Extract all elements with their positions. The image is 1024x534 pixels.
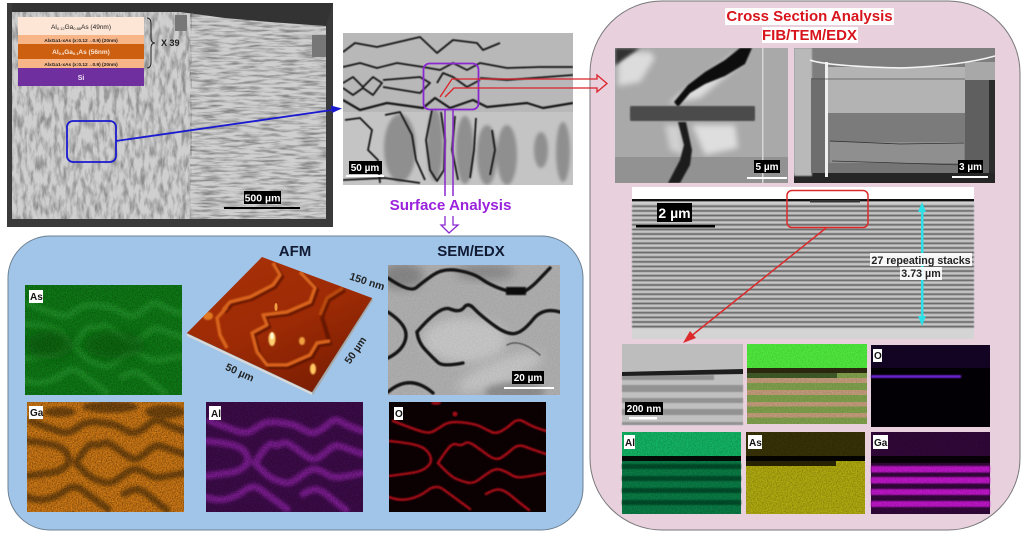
panel: magnified surface SEM	[343, 33, 573, 185]
heading: SEM/EDX: SEM/EDX	[437, 243, 505, 260]
callout: blue region on wafer	[67, 121, 116, 162]
map: Al: Al	[211, 409, 221, 420]
layer stack diagram: 0.88	[73, 26, 82, 31]
SEM image with 20 µm scale: 20 µm	[514, 373, 542, 384]
layer stack diagram	[18, 17, 144, 86]
map: As	[25, 285, 182, 395]
map: Al	[206, 402, 363, 512]
map: Ga: Ga	[30, 408, 44, 419]
image: FIB trench on crack: 5 µm	[756, 162, 779, 173]
image: FIB trench on crack	[615, 48, 788, 183]
panel: surface analysis	[8, 236, 583, 530]
map: As: As	[749, 438, 762, 449]
layer stack diagram: AlxGa1-xAs (x:0.12→0.9) (20nm)	[44, 62, 118, 68]
arrow: 27 stack thickness	[918, 202, 926, 326]
layer stack diagram: 0.12	[57, 26, 65, 31]
label: repeating stacks: 27 repeating stacks	[871, 255, 971, 267]
map: O: O	[395, 409, 403, 420]
map: Ga	[871, 432, 990, 514]
scale bar: 2 µm	[636, 203, 715, 228]
map: Ga: Ga	[874, 438, 888, 449]
3D AFM surface: 150 nm	[348, 271, 386, 293]
arrow: wafer to magnified SEM	[116, 106, 342, 141]
layer stack diagram: 0.1	[73, 51, 79, 56]
layer stack diagram: Al	[51, 24, 57, 31]
arrow: surface analysis lines	[445, 110, 453, 196]
image: FIB lamella	[794, 48, 995, 183]
brace: x 39 repeat	[147, 18, 180, 68]
image: TEM multilayer stack	[632, 187, 974, 339]
layer stack diagram: AlxGa1-xAs (x:0.12→0.9) (20nm)	[44, 38, 118, 44]
label: repeating stacks: 3.73 µm	[901, 268, 941, 280]
map: Ga	[27, 401, 185, 512]
heading: surface analysis: Surface Analysis	[390, 197, 511, 214]
3D AFM surface	[187, 257, 386, 395]
layer stack diagram: Al	[52, 49, 59, 56]
heading: AFM: AFM	[279, 243, 311, 260]
layer stack diagram: 0.9	[59, 51, 65, 56]
scale bar: 50 µm	[346, 161, 384, 177]
layer stack diagram: Ga	[65, 24, 74, 31]
image: HAADF detail: 200 nm	[627, 404, 661, 415]
scale bar: 500 µm	[224, 191, 300, 209]
callout: purple region	[424, 64, 478, 110]
map: As	[746, 432, 865, 514]
map: O	[871, 345, 990, 427]
image: FIB lamella: 3 µm	[959, 162, 982, 173]
map: O: O	[874, 351, 882, 362]
map: As: As	[30, 292, 43, 303]
map: O	[389, 401, 546, 512]
arrow: surface analysis down	[441, 216, 458, 233]
callout: red TEM region	[787, 190, 868, 228]
3D AFM surface: 50 µm	[342, 335, 369, 366]
image: HAADF detail	[622, 344, 743, 425]
SEM image with 20 µm scale	[380, 263, 560, 401]
panel: wafer SEM overview	[7, 3, 333, 227]
map: Al: Al	[625, 438, 635, 449]
heading: cross section analysis: Cross Section Analysis	[726, 8, 893, 25]
heading: cross section analysis: FIB/TEM/EDX	[762, 27, 857, 44]
layer stack diagram: As (49nm)	[81, 24, 111, 31]
layer stack diagram: Si	[78, 75, 84, 82]
map: composite overlay	[747, 344, 867, 424]
scale bar: 50 µm: 50 µm	[351, 163, 379, 174]
map: Al	[622, 432, 741, 514]
arrow: to cross section	[440, 75, 607, 97]
panel: cross section analysis	[590, 1, 1020, 530]
brace: x 39 repeat: X 39	[161, 38, 180, 48]
layer stack diagram: Ga	[64, 49, 73, 56]
arrow: TEM region to detail	[683, 228, 826, 343]
scale bar: 500 µm: 500 µm	[245, 192, 280, 204]
scale bar: 2 µm: 2 µm	[658, 205, 691, 221]
heading: cross section analysis	[725, 8, 894, 44]
3D AFM surface: 50 µm	[223, 361, 256, 384]
layer stack diagram: As (56nm)	[78, 49, 110, 56]
label: repeating stacks	[870, 253, 972, 280]
